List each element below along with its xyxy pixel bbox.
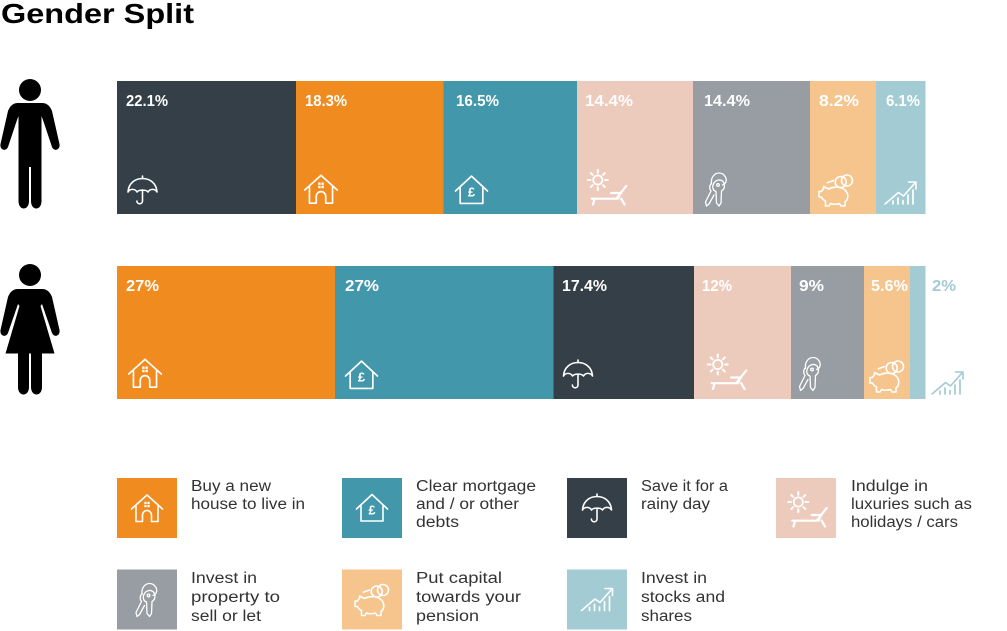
- legend: clear mortgage: [342, 478, 536, 538]
- legend: property: sell or let: [191, 608, 262, 625]
- legend: rainy day: [567, 478, 728, 538]
- chart: women's bar: [117, 266, 963, 399]
- legend: buy a new house: [117, 478, 305, 538]
- legend: rainy day: rainy day: [641, 496, 710, 513]
- chart: men's bar: 14.4%: [585, 93, 633, 110]
- legend: pension: towards your: [416, 589, 521, 606]
- chart: women's bar: 27%: [126, 278, 159, 295]
- legend: stocks: shares: [641, 608, 692, 625]
- legend: pension: pension: [416, 608, 479, 625]
- legend: buy a new house: house to live in: [191, 496, 305, 513]
- chart: men's bar: 16.5%: [456, 93, 499, 110]
- chart: women's bar: £: [358, 370, 366, 385]
- legend: stocks: [567, 570, 725, 630]
- legend: rainy day: Save it for a: [641, 478, 728, 495]
- icon: man: [0, 79, 60, 208]
- chart: men's bar: 14.4%: [704, 93, 750, 110]
- icon: woman: [0, 264, 60, 394]
- legend: luxuries: Indulge in: [851, 478, 928, 495]
- legend: clear mortgage: £: [369, 504, 376, 518]
- chart: men's bar: 18.3%: [305, 93, 347, 110]
- legend: clear mortgage: and / or other: [416, 496, 519, 513]
- chart: women's bar: 5.6%: [871, 278, 908, 295]
- chart: women's bar: 9%: [799, 278, 824, 295]
- chart: men's bar: [117, 81, 926, 214]
- legend: property: property to: [191, 589, 280, 606]
- legend: luxuries: [776, 478, 972, 538]
- chart: men's bar: 8.2%: [819, 93, 859, 110]
- legend: clear mortgage: debts: [416, 514, 459, 531]
- legend: pension: [342, 570, 521, 630]
- legend: property: [117, 570, 280, 630]
- legend: luxuries: holidays / cars: [851, 514, 958, 531]
- chart: women's bar: 2%: [932, 278, 956, 295]
- chart: men's bar: 22.1%: [126, 93, 168, 110]
- legend: stocks: stocks and: [641, 589, 725, 606]
- legend: clear mortgage: Clear mortgage: [416, 478, 536, 495]
- chart: men's bar: 6.1%: [886, 93, 920, 110]
- legend: property: Invest in: [191, 570, 257, 587]
- chart: men's bar: £: [468, 185, 476, 200]
- legend: buy a new house: Buy a new: [191, 478, 272, 495]
- chart: women's bar: 12%: [702, 278, 732, 295]
- chart: women's bar: 27%: [345, 278, 379, 295]
- legend: stocks: Invest in: [641, 570, 707, 587]
- chart: women's bar: 17.4%: [562, 278, 607, 295]
- legend: pension: Put capital: [416, 570, 502, 587]
- legend: luxuries: luxuries such as: [851, 496, 972, 513]
